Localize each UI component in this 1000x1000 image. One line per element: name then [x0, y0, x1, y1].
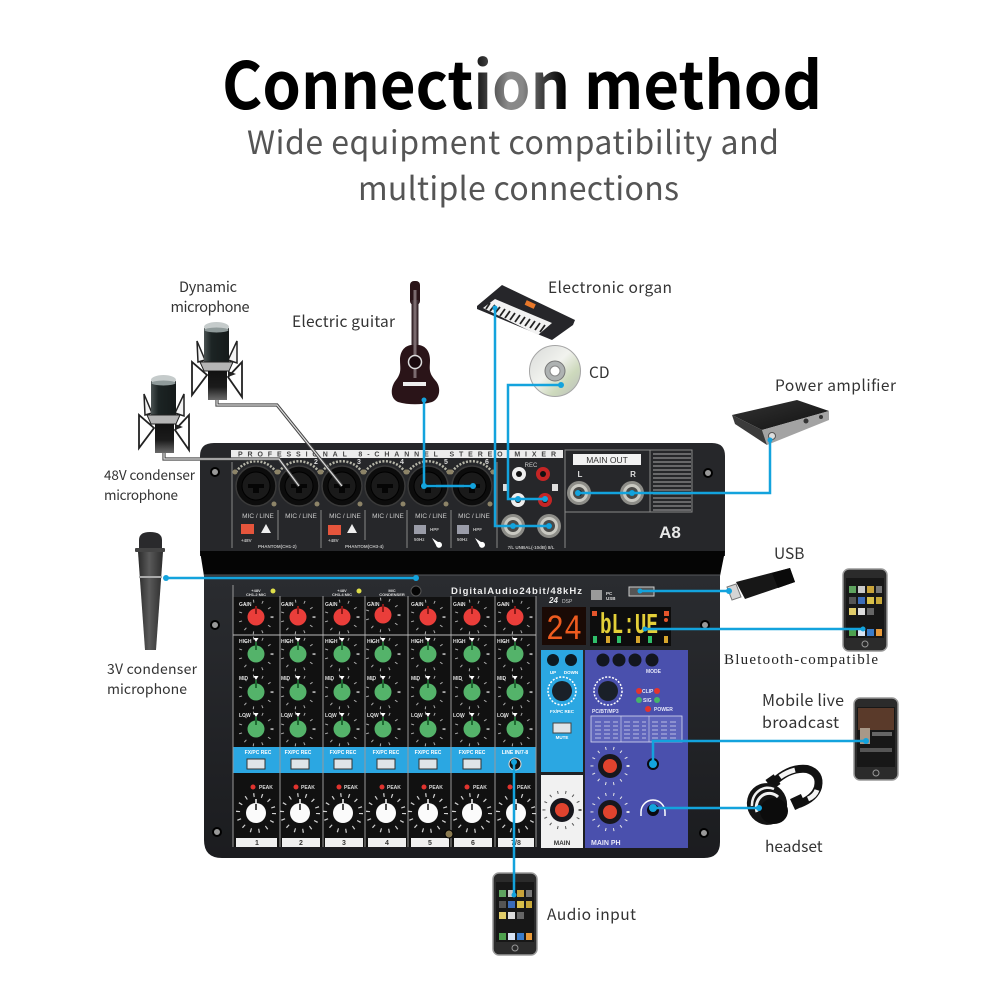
panel: control surface: GAIN: [239, 602, 252, 608]
panel: control surface: 6: [471, 840, 475, 847]
panel: rear connector section: PHANTOM(CH1-2): [258, 544, 297, 549]
panel: FX blue: DOWN: [564, 670, 578, 675]
icon: phone (mobile live): [854, 698, 898, 780]
panel: control surface: LOW: [453, 713, 465, 719]
panel: control surface: GAIN: [325, 602, 338, 608]
panel: control surface: HIGH: [497, 639, 510, 645]
label: Mobile live broadcast: Mobile live: [762, 687, 844, 711]
panel: control surface: MID: [325, 676, 335, 682]
panel: control surface: CH1-2 MIC: [246, 592, 266, 597]
panel: control surface: LOW: [497, 713, 509, 719]
panel: rear connector section: R: [630, 470, 636, 479]
label: 3V condenser microphone: microphone: [107, 679, 187, 699]
label: Bluetooth-compatible: Bluetooth-compatible: [724, 652, 878, 668]
panel: control surface: MID: [239, 676, 249, 682]
panel: control surface: MIC: [388, 588, 396, 593]
panel: rear connector section: MIC / LINE: [458, 513, 491, 520]
panel: control surface: HIGH: [367, 639, 380, 645]
panel: rear connector section: 4: [400, 459, 404, 466]
panel: control surface: PEAK: [387, 785, 401, 791]
panel: control surface: FX/PC REC: [245, 750, 272, 756]
panel: MP3 purple: SIG: [643, 698, 652, 704]
panel: rear connector section: MIC / LINE: [372, 513, 405, 520]
panel: rear connector section: MIC / LINE: [329, 513, 362, 520]
panel: rear connector section: PROFESSIONAL 8-CHANNEL STEREO MIXER: [238, 452, 556, 458]
label: Power amplifier: Power amplifier: [775, 374, 897, 396]
panel: control surface: HIGH: [453, 639, 466, 645]
panel: control surface: LOW: [325, 713, 337, 719]
label: Mobile live broadcast: [762, 687, 844, 733]
panel: rear connector section: 7/L UNBAL(-10dB) 8/L: [508, 545, 555, 550]
panel: control surface: LOW: [411, 713, 423, 719]
LED display: bLUE: [590, 607, 671, 646]
MAIN knob: [544, 792, 580, 847]
icon: electronic organ keyboard: [477, 285, 575, 340]
label: 48V condenser microphone: [104, 464, 196, 504]
panel: MP3 purple: MAIN PH: [591, 840, 621, 847]
panel: control surface: PEAK: [344, 785, 358, 791]
panel: control surface: 24: [548, 596, 558, 605]
panel: MP3 purple: PC/BT/MP3: [592, 709, 619, 715]
panel: control surface: +48V: [337, 588, 347, 593]
panel: control surface: DigitalAudio24bit/48kHz: [451, 586, 582, 597]
panel: MP3 purple: [585, 650, 688, 848]
panel: rear connector section: MAIN OUT: [586, 455, 628, 465]
panel: rear connector section: 2: [314, 459, 318, 466]
mixer: [200, 443, 725, 858]
panel: FX blue: [541, 650, 583, 772]
panel: FX blue: UP: [550, 670, 556, 675]
icon: phone (audio input): [493, 873, 537, 955]
panel: control surface: LOW: [239, 713, 251, 719]
panel: FX blue: FX/PC REC: [550, 709, 575, 714]
label: Electronic organ: Electronic organ: [548, 276, 672, 298]
panel: control surface: HIGH: [411, 639, 424, 645]
panel: rear connector section: HPF: [430, 527, 439, 532]
panel: rear connector section: 50Hz: [457, 537, 468, 542]
panel: control surface: GAIN: [281, 602, 294, 608]
panel: control surface: HIGH: [281, 639, 294, 645]
panel: rear connector section: MIC / LINE: [285, 513, 318, 520]
panel: control surface: GAIN: [411, 602, 424, 608]
icon: headphones: [741, 769, 819, 831]
icon: power amplifier: [732, 400, 829, 445]
panel: rear connector section: L: [578, 470, 583, 479]
panel: control surface: MID: [453, 676, 463, 682]
connection dots: [163, 306, 869, 898]
panel: control surface: PC: [606, 591, 613, 596]
panel: control surface: USB: [606, 596, 616, 601]
label: Mobile live broadcast: broadcast: [762, 709, 839, 733]
icon: dynamic microphone: [192, 322, 242, 400]
panel: control surface: LINE IN/7-8: [502, 750, 528, 756]
panel: control surface: DSP: [562, 599, 573, 605]
panel: rear connector section: A8: [659, 523, 681, 542]
panel: control surface: FX/PC REC: [285, 750, 312, 756]
arrow: mic cables: [164, 400, 342, 486]
panel: control surface: PEAK: [473, 785, 487, 791]
subtitle: Wide equipment compatibility and: [247, 118, 779, 164]
icon: phone (bluetooth): [843, 569, 887, 651]
panel: rear connector section: +48V: [328, 538, 339, 543]
panel: control surface: 1: [255, 840, 259, 847]
LED display: bLUE: bL:UE: [600, 609, 658, 642]
panel: control surface: FX/PC REC: [459, 750, 486, 756]
panel: rear connector section: 6: [485, 459, 489, 466]
panel: control surface: GAIN: [367, 602, 380, 608]
panel: control surface: CH3-4 MIC: [332, 592, 352, 597]
panel: control surface: +48V: [251, 588, 261, 593]
title: Connection method: [222, 34, 822, 128]
arrows: blue connection lines: [166, 308, 866, 895]
label: Electric guitar: Electric guitar: [292, 310, 396, 332]
icon: guitar: [392, 281, 439, 404]
panel: control surface: FX/PC REC: [373, 750, 400, 756]
panel: control surface: MID: [411, 676, 421, 682]
panel: control surface: MID: [281, 676, 291, 682]
panel: control surface: PEAK: [301, 785, 315, 791]
panel: MP3 purple: MODE: [646, 669, 662, 675]
label: Dynamic microphone: [170, 276, 250, 317]
label: CD: CD: [589, 361, 610, 383]
icon: USB drive: [727, 568, 795, 600]
panel: control surface: GAIN: [497, 602, 510, 608]
label: Audio input: Audio input: [547, 903, 636, 925]
label: USB: USB: [774, 542, 804, 564]
panel: control surface: HIGH: [325, 639, 338, 645]
panel: control surface: LOW: [281, 713, 293, 719]
panel: rear connector section: MIC / LINE: [415, 513, 448, 520]
panel: MP3 purple: CLIP: [642, 689, 654, 695]
panel: control surface: 2: [299, 840, 303, 847]
panel: control surface: 4: [385, 840, 389, 847]
label: Dynamic microphone: Dynamic: [179, 276, 237, 297]
panel: control surface: LOW: [367, 713, 379, 719]
label: Dynamic microphone: microphone: [170, 296, 250, 317]
panel: control surface: PEAK: [259, 785, 273, 791]
label: 3V condenser microphone: 3V condenser: [107, 659, 198, 679]
icon: CD: [530, 346, 580, 396]
panel: control surface: 7/8: [511, 840, 521, 847]
panel: rear connector section: +48V: [241, 538, 252, 543]
label: headset: headset: [765, 835, 823, 857]
label: 48V condenser microphone: microphone: [104, 484, 178, 504]
panel: control surface: FX/PC REC: [415, 750, 442, 756]
panel: control surface: MID: [367, 676, 377, 682]
subtitle: [247, 118, 779, 210]
panel: rear connector section: MIC / LINE: [242, 513, 275, 520]
panel: rear connector section: [200, 443, 725, 576]
panel: control surface: [204, 575, 720, 858]
panel: control surface: 5: [428, 840, 432, 847]
panel: rear connector section: HPF: [473, 527, 482, 532]
panel: FX blue: MUTE: [556, 735, 568, 740]
panel: control surface: 3: [342, 840, 346, 847]
label: 48V condenser microphone: 48V condenser: [104, 464, 196, 484]
subtitle: multiple connections: [358, 164, 679, 210]
icon: handheld microphone: [135, 532, 165, 650]
panel: control surface: PEAK: [429, 785, 443, 791]
panel: MP3 purple: POWER: [654, 707, 673, 713]
MAIN knob: MAIN: [554, 840, 571, 847]
icon: 48V condenser microphone: [139, 375, 189, 453]
panel: control surface: FX/PC REC: [330, 750, 357, 756]
panel: control surface: GAIN: [453, 602, 466, 608]
panel: rear connector section: 3: [357, 459, 361, 466]
panel: control surface: HIGH: [239, 639, 252, 645]
LED display: 24: 24: [546, 610, 582, 650]
panel: control surface: PEAK: [517, 785, 531, 791]
panel: control surface: CONDENSER: [379, 592, 405, 597]
panel: rear connector section: PHANTOM(CH3-4): [345, 544, 384, 549]
panel: rear connector section: 5: [444, 459, 448, 466]
label: 3V condenser microphone: [107, 659, 198, 699]
panel: rear connector section: REC: [525, 463, 538, 469]
panel: control surface: MID: [497, 676, 507, 682]
panel: rear connector section: 50Hz: [414, 537, 425, 542]
